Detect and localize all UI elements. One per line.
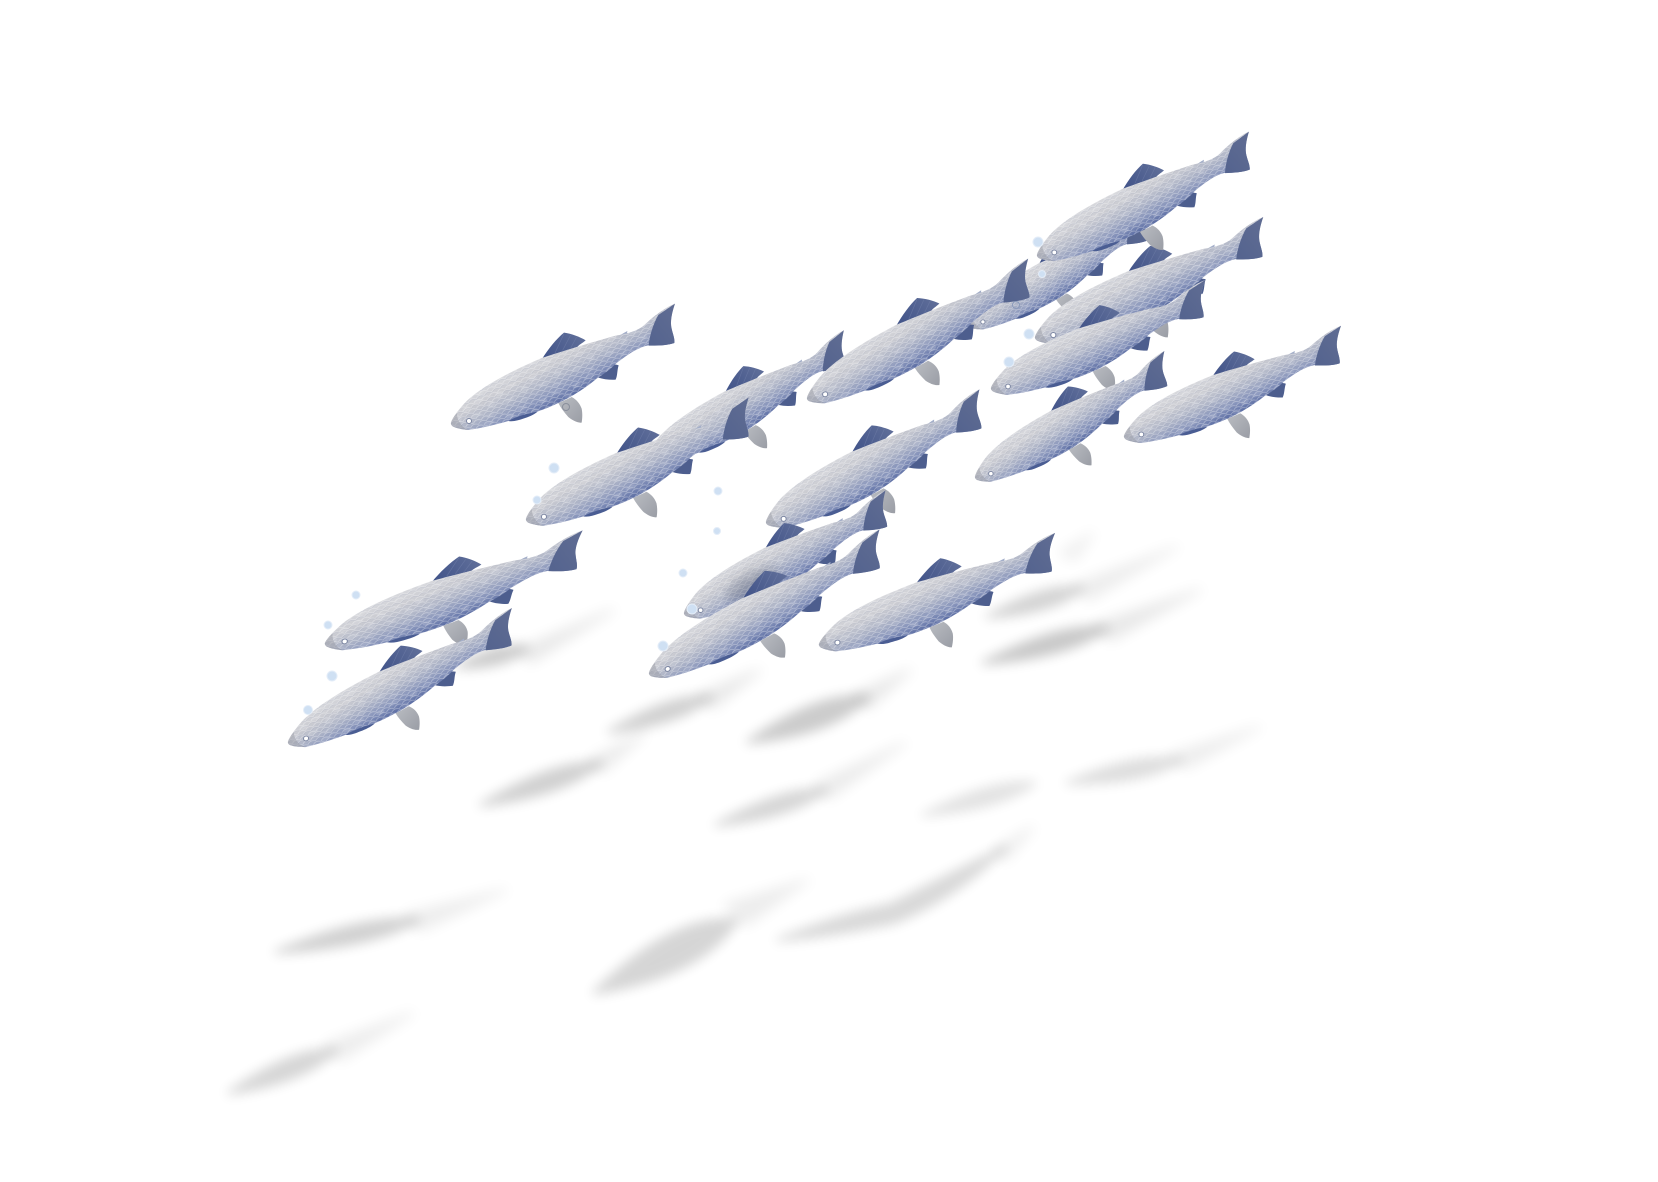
shadow 10 [276, 890, 506, 952]
fish: far left upper [324, 525, 583, 655]
fish: upper right second [1035, 216, 1263, 345]
fish: hidden behind upper cluster [958, 207, 1156, 331]
shadow 2 [609, 670, 760, 732]
shadow 6 [923, 783, 1035, 815]
fish: lower centre [646, 529, 882, 680]
fish: far left lower [287, 608, 513, 749]
fish: lower centre upper [678, 490, 892, 620]
fish: right middle [964, 351, 1175, 483]
fish: upper right third [991, 275, 1205, 399]
fish: centre-left [525, 397, 750, 526]
fish: centre [758, 389, 988, 529]
shadow 9 [987, 533, 1177, 617]
shadow 4 [481, 733, 645, 805]
shadow 12 [778, 827, 1033, 940]
shadow 1 [457, 610, 613, 667]
fish: lower right [818, 527, 1055, 657]
shadow 11 [594, 880, 808, 993]
fish: upper centre [801, 259, 1034, 405]
fish: solo upper left [451, 304, 675, 430]
fish: far right [1124, 322, 1341, 447]
shadow 7 [1067, 727, 1260, 783]
fish: behind centre-left [636, 330, 854, 465]
shadow group on seabed [229, 533, 1260, 1093]
shadow 8 [983, 590, 1200, 663]
school of fish [287, 132, 1341, 749]
shade cast on fish [722, 562, 782, 608]
shadow 5 [716, 743, 905, 825]
shadow 13 [229, 1013, 413, 1093]
fish: topmost [1033, 132, 1253, 262]
shadow 3 [748, 670, 910, 742]
air bubbles [304, 237, 1046, 714]
